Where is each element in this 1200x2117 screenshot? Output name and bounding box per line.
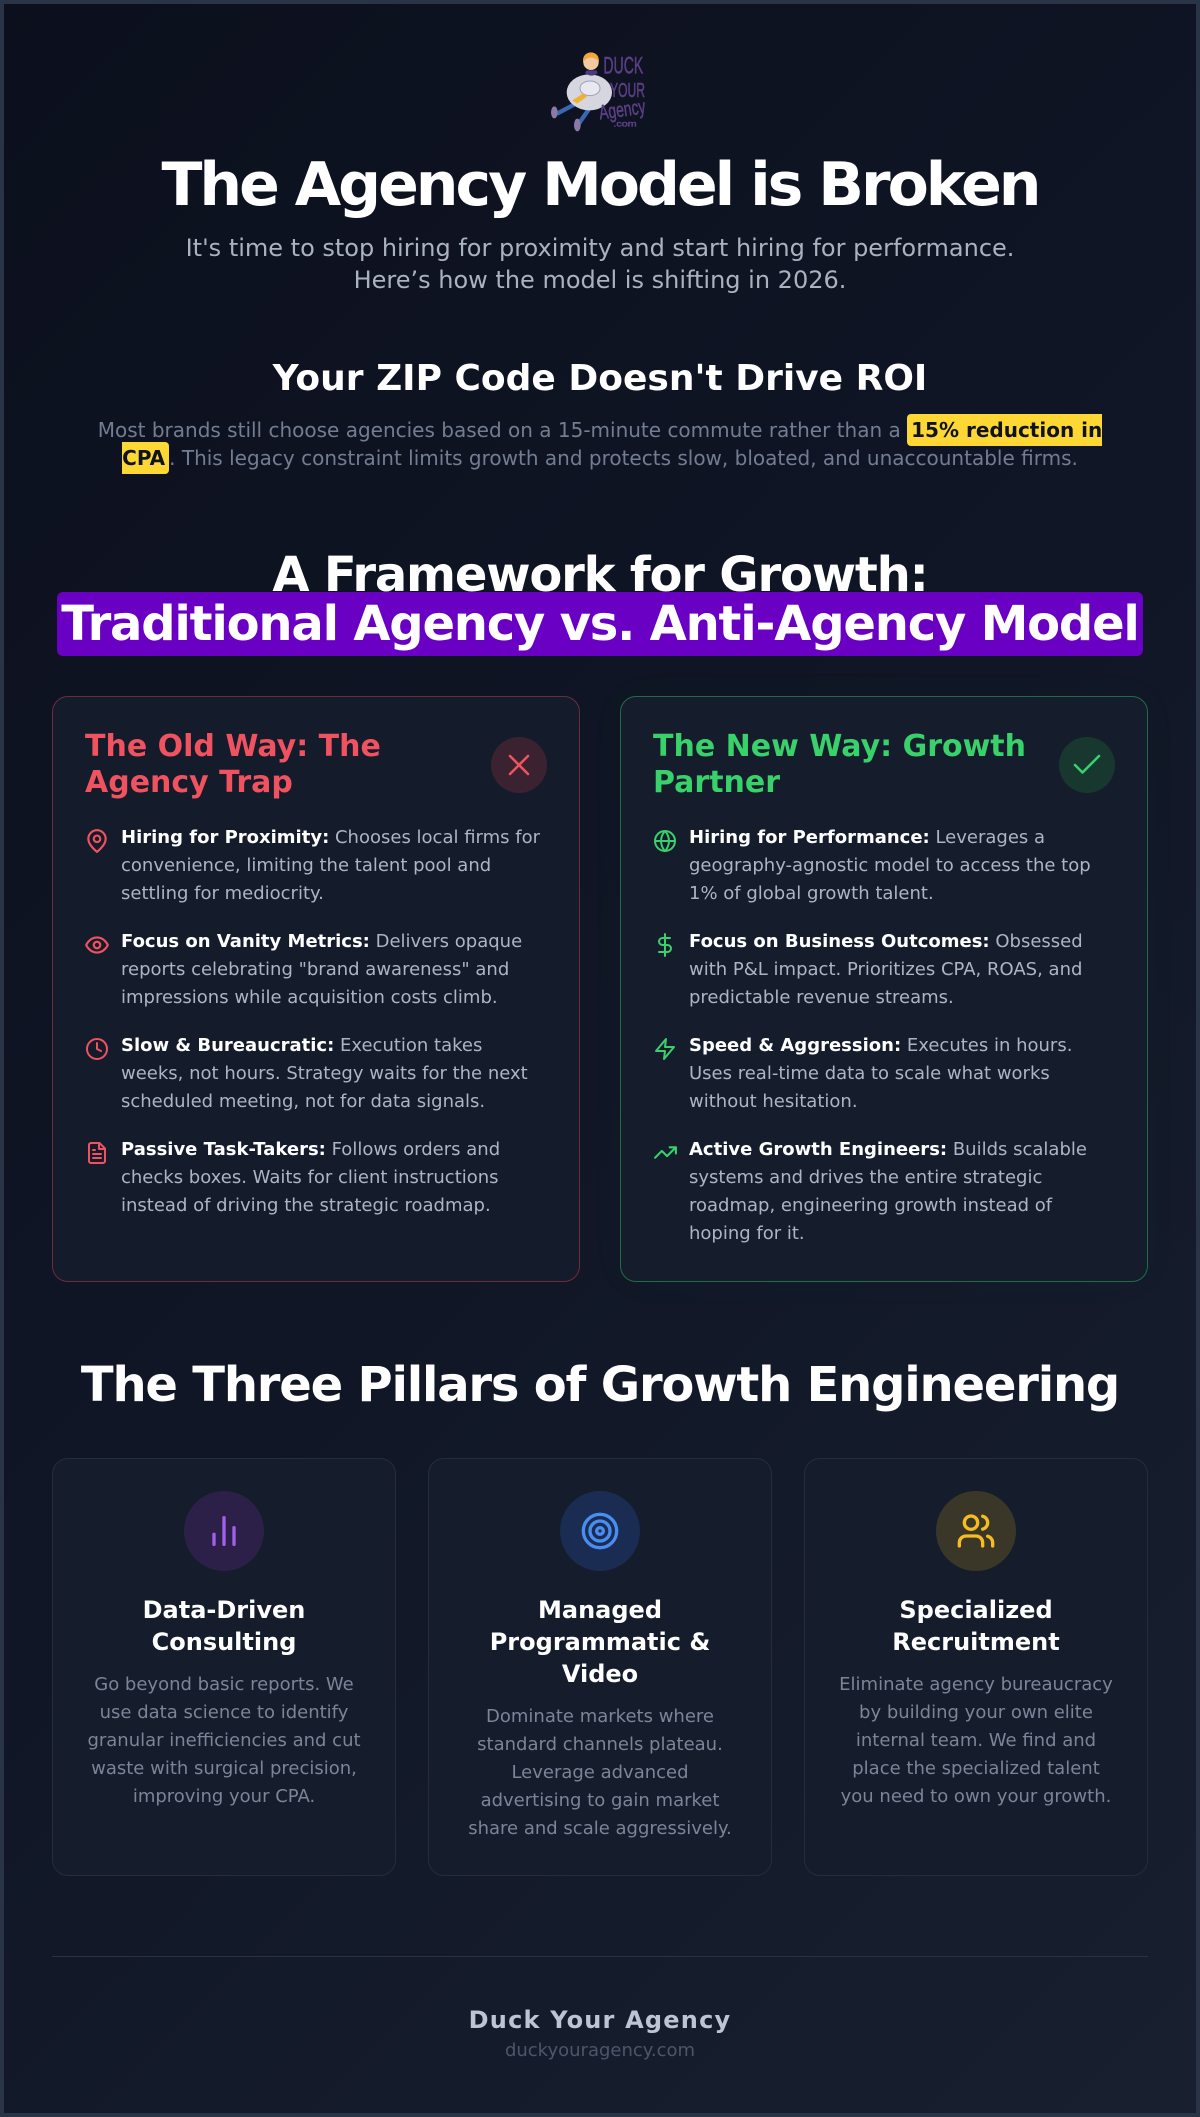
panel: the old way: convenience, limiting the talent pool and xyxy=(121,855,491,876)
icon: dollar xyxy=(658,933,672,957)
panel: the old way: settling for mediocrity. xyxy=(121,883,324,904)
subtitle: Here’s how the model is shifting in 2026. xyxy=(354,266,846,294)
intro paragraph with highlight xyxy=(98,414,1102,474)
framework heading xyxy=(57,547,1143,656)
old way heading xyxy=(85,729,381,800)
new way heading: The New Way: Growth xyxy=(653,729,1026,764)
panel: specialized recruitment xyxy=(804,1458,1148,1876)
pillar text: standard channels plateau. xyxy=(477,1734,723,1755)
panel: the new way: without hesitation. xyxy=(689,1091,858,1112)
subtitle: It's time to stop hiring for proximity and start hiring for performance. xyxy=(186,234,1014,262)
icon: file xyxy=(88,1142,106,1164)
icon: target xyxy=(560,1491,640,1571)
panel: data-driven consulting xyxy=(52,1458,396,1876)
icon: check badge xyxy=(1059,737,1115,793)
icon: bar chart xyxy=(184,1491,264,1571)
pillar text: improving your CPA. xyxy=(133,1786,315,1807)
panel: the new way: Uses real-time data to scale what works xyxy=(689,1063,1050,1084)
intro paragraph with highlight: CPA. This legacy constraint limits growth and protects slow, bloated, and unaccountable firms. xyxy=(122,446,1078,470)
panel: the new way: predictable revenue streams. xyxy=(689,987,954,1008)
pillar text: granular inefficiencies and cut xyxy=(87,1730,361,1751)
new way heading xyxy=(653,729,1026,800)
heading: your zip code: Your ZIP Code Doesn't Drive ROI xyxy=(273,358,927,399)
pillar text: Go beyond basic reports. We xyxy=(94,1674,354,1695)
pillar heading: Consulting xyxy=(152,1628,296,1656)
icon: users xyxy=(936,1491,1016,1571)
icon: x badge xyxy=(491,737,547,793)
panel: the new way: Speed & Aggression: Executes in hours. xyxy=(689,1035,1072,1056)
logo: duck your agency mascot xyxy=(551,52,647,132)
new way item: growth engineers xyxy=(654,1139,1087,1244)
panel: the old way xyxy=(52,696,580,1282)
icon: globe xyxy=(654,830,676,852)
logo: duck your agency mascot: .com xyxy=(613,119,637,129)
pillar heading xyxy=(892,1596,1060,1656)
pillar text: use data science to identify xyxy=(100,1702,348,1723)
panel: managed programmatic xyxy=(428,1458,772,1876)
pillar text: Eliminate agency bureaucracy xyxy=(839,1674,1113,1695)
panel: the old way: Passive Task-Takers: Follows orders and xyxy=(121,1139,500,1160)
icon: clock xyxy=(86,1038,108,1060)
pillar text: internal team. We find and xyxy=(856,1730,1096,1751)
icon: trending up xyxy=(654,1146,677,1159)
pillar text: Leverage advanced xyxy=(511,1762,689,1783)
pillar heading xyxy=(490,1596,710,1688)
pillar heading: Data-Driven xyxy=(143,1596,305,1624)
icon: eye xyxy=(85,936,109,954)
panel: the new way: roadmap, engineering growth instead of xyxy=(689,1195,1052,1216)
pillar heading xyxy=(143,1596,305,1656)
new way heading: Partner xyxy=(653,765,780,800)
old way item: proximity xyxy=(87,827,540,904)
pillar text xyxy=(468,1706,732,1839)
pillar heading: Programmatic & xyxy=(490,1628,710,1656)
panel: the old way: Slow & Bureaucratic: Execution takes xyxy=(121,1035,482,1056)
footer url: duckyouragency.com xyxy=(505,2040,695,2061)
pillar heading: Managed xyxy=(538,1596,662,1624)
pillar text: advertising to gain market xyxy=(481,1790,719,1811)
pillar text: place the specialized talent xyxy=(852,1758,1100,1779)
heading: three pillars: The Three Pillars of Growth Engineering xyxy=(81,1357,1119,1413)
pillar heading: Video xyxy=(562,1660,638,1688)
pillar text: share and scale aggressively. xyxy=(468,1818,732,1839)
intro paragraph with highlight: Most brands still choose agencies based on a 15-minute commute rather than a 15% reduction in xyxy=(98,418,1102,442)
pillar text xyxy=(87,1674,361,1807)
old way heading: The Old Way: The xyxy=(85,729,381,764)
old way item: task-takers xyxy=(88,1139,500,1216)
footer brand: Duck Your Agency xyxy=(469,2006,731,2034)
title: The Agency Model is Broken xyxy=(161,150,1039,220)
pillar heading: Specialized xyxy=(899,1596,1053,1624)
panel: the new way: with P&L impact. Prioritizes CPA, ROAS, and xyxy=(689,959,1082,980)
old way item: slow xyxy=(86,1035,528,1112)
panel: the new way: Active Growth Engineers: Builds scalable xyxy=(689,1139,1087,1160)
pillar text: you need to own your growth. xyxy=(841,1786,1111,1807)
panel: the old way: instead of driving the strategic roadmap. xyxy=(121,1195,491,1216)
icon: map pin xyxy=(87,829,107,853)
panel: the old way: Hiring for Proximity: Chooses local firms for xyxy=(121,827,540,848)
panel: the old way: scheduled meeting, not for data signals. xyxy=(121,1091,485,1112)
panel: the old way: impressions while acquisition costs climb. xyxy=(121,987,498,1008)
panel: the new way: Focus on Business Outcomes: Obsessed xyxy=(689,931,1083,952)
panel: the old way: Focus on Vanity Metrics: Delivers opaque xyxy=(121,931,522,952)
old way item: vanity metrics xyxy=(85,931,522,1008)
panel: the new way: geography-agnostic model to access the top xyxy=(689,855,1091,876)
framework heading line one: A Framework for Growth: xyxy=(272,547,928,603)
pillar text xyxy=(839,1674,1113,1807)
old way heading: Agency Trap xyxy=(85,765,293,800)
subtitle xyxy=(186,234,1014,294)
pillar text: by building your own elite xyxy=(859,1702,1093,1723)
new way item: business outcomes xyxy=(658,931,1083,1008)
pillar text: Dominate markets where xyxy=(486,1706,714,1727)
pillar text: waste with surgical precision, xyxy=(91,1758,357,1779)
new way item: performance xyxy=(654,827,1091,904)
panel: the new way: systems and drives the entire strategic xyxy=(689,1167,1042,1188)
panel: the old way: reports celebrating "brand awareness" and xyxy=(121,959,509,980)
panel: the new way: hoping for it. xyxy=(689,1223,805,1244)
panel: the new way: Hiring for Performance: Leverages a xyxy=(689,827,1045,848)
icon: zap xyxy=(655,1038,675,1060)
panel: the new way xyxy=(620,696,1148,1282)
new way item: speed xyxy=(655,1035,1072,1112)
pillar heading: Recruitment xyxy=(892,1628,1060,1656)
panel: the old way: checks boxes. Waits for client instructions xyxy=(121,1167,499,1188)
panel: the new way: 1% of global growth talent. xyxy=(689,883,934,904)
framework heading highlighted line: Traditional Agency vs. Anti-Agency Model xyxy=(61,596,1139,652)
panel: the old way: weeks, not hours. Strategy waits for the next xyxy=(121,1063,528,1084)
